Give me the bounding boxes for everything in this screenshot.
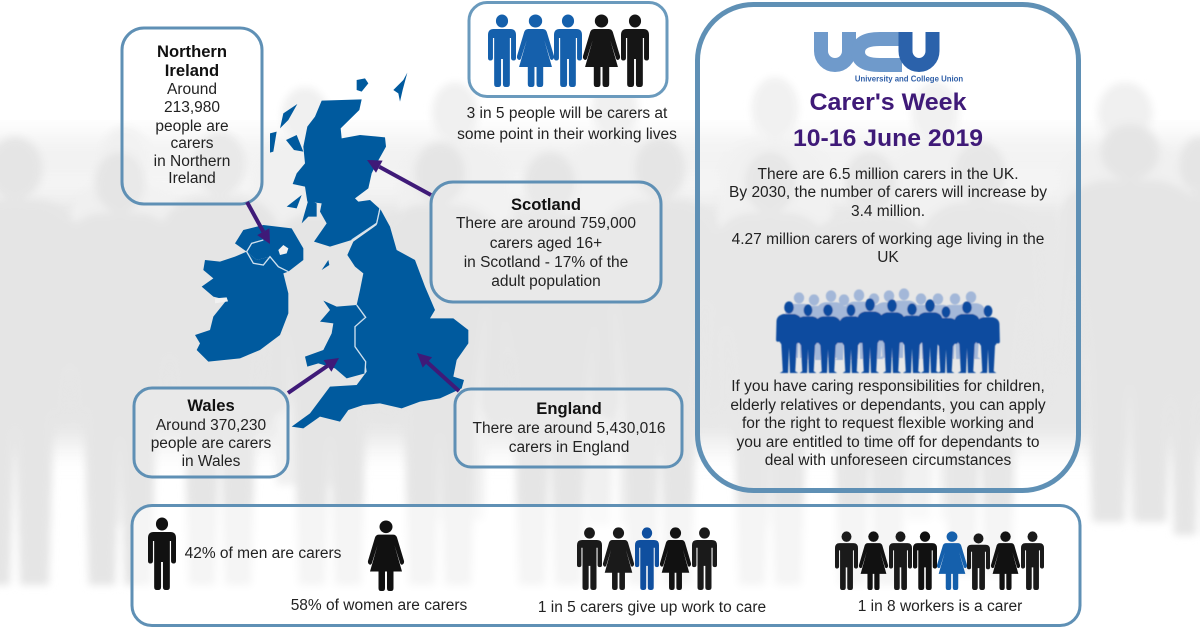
panel: Northern Ireland — [122, 28, 262, 204]
panel: Northern Ireland: Around — [167, 81, 217, 98]
panel: Northern Ireland: 213,980 — [164, 99, 220, 116]
panel: statistics strip — [132, 506, 1080, 626]
panel: Wales: Wales — [187, 396, 235, 415]
icon: UCU logo: University and College Union — [855, 74, 963, 84]
icon: woman — [368, 520, 404, 591]
panel: Wales — [134, 388, 288, 477]
panel: 3 in 5 people pictogram — [469, 2, 667, 96]
panel: England — [455, 389, 682, 467]
icon: UCU logo — [821, 32, 963, 84]
Wales — [305, 301, 365, 378]
text: carer numbers — [729, 166, 1047, 220]
panel: Northern Ireland: people are — [155, 118, 229, 135]
Scotland — [293, 99, 386, 247]
title: Carer's Week: Carer's Week — [810, 89, 967, 116]
text: flexible working rights: you are entitled to time off for dependants to — [736, 434, 1040, 451]
panel: Carer's Week — [698, 4, 1078, 490]
Northern Ireland — [235, 225, 303, 272]
text: 1 in 5 carers: 1 in 5 carers give up work to care — [538, 599, 766, 616]
panel: Scotland — [431, 182, 661, 302]
icon: crowd of people — [776, 288, 1000, 373]
panel: Northern Ireland: Ireland — [168, 170, 216, 187]
panel: England: carers in England — [509, 439, 629, 456]
Republic of Ireland — [195, 252, 288, 362]
panel: Wales: people are carers — [151, 435, 272, 452]
text: carer numbers: There are 6.5 million carers in the UK. — [757, 166, 1019, 183]
text: flexible working rights: deal with unforeseen circumstances — [765, 452, 1011, 469]
panel: Northern Ireland: Northern — [157, 42, 227, 61]
text: 3 in 5 people will be carers: some point in their working lives — [457, 126, 677, 143]
text: 3 in 5 people will be carers: 3 in 5 people will be carers at — [467, 105, 668, 122]
icon: man — [148, 518, 176, 590]
text: flexible working rights: If you have caring responsibilities for children, — [731, 378, 1045, 395]
arrow: Northern Ireland — [247, 202, 270, 244]
panel: Northern Ireland: in Northern — [154, 153, 230, 170]
panel: Wales: in Wales — [182, 453, 241, 470]
text: flexible working rights: elderly relatives or dependants, you can apply — [730, 397, 1046, 414]
text: working age carers: UK — [877, 249, 899, 266]
panel: Northern Ireland: carers — [170, 135, 214, 152]
panel: Scotland: adult population — [491, 273, 601, 290]
arrow: Wales — [288, 358, 339, 393]
Scottish islands — [270, 73, 407, 270]
panel: Scotland: Scotland — [511, 195, 581, 214]
panel: Wales: Around 370,230 — [156, 417, 267, 434]
text: working age carers: 4.27 million carers of working age living in the — [732, 231, 1044, 248]
title: dates: 10-16 June 2019 — [793, 125, 983, 152]
text: 3 in 5 people will be carers — [457, 105, 677, 143]
text: 1 in 8 workers: 1 in 8 workers is a carer — [858, 598, 1022, 615]
text: flexible working rights: for the right to request flexible working and — [742, 415, 1034, 432]
text: 58% of women: 58% of women are carers — [291, 597, 468, 614]
icon: 1 in 8 pictogram — [835, 531, 1044, 590]
panel: Scotland: in Scotland - 17% of the — [464, 254, 628, 271]
panel: England: England — [536, 399, 602, 418]
text: flexible working rights — [730, 378, 1046, 469]
text: carer numbers: By 2030, the number of carers will increase by — [729, 184, 1047, 201]
map of the UK and Ireland — [195, 73, 468, 428]
panel: Scotland: carers aged 16+ — [490, 235, 602, 252]
text: carer numbers: 3.4 million. — [851, 203, 925, 220]
text: working age carers — [732, 231, 1044, 266]
arrow: England — [417, 353, 459, 391]
panel: England: There are around 5,430,016 — [472, 420, 666, 437]
arrow: Scotland — [367, 160, 431, 195]
England — [292, 208, 468, 428]
panel: Northern Ireland: Ireland — [165, 61, 219, 80]
text: 42% of men: 42% of men are carers — [185, 545, 342, 562]
panel: Scotland: There are around 759,000 — [456, 215, 636, 232]
icon: 1 in 5 pictogram — [577, 527, 717, 590]
